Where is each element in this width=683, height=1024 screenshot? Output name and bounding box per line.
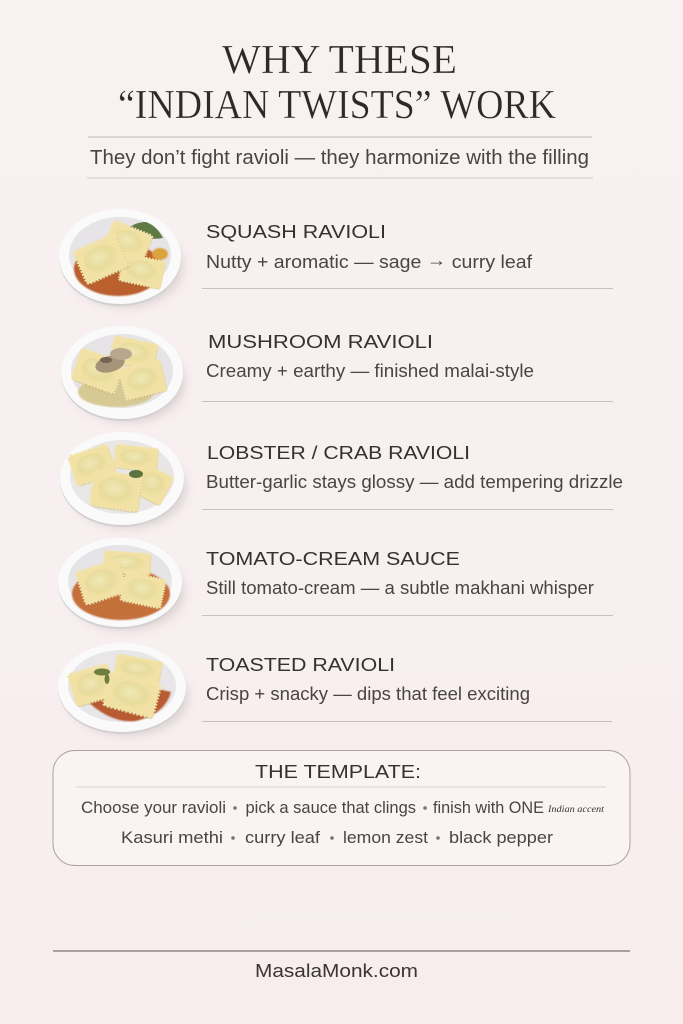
text: template steps: Choose your ravioli	[81, 799, 226, 817]
heading: the template: THE TEMPLATE:	[255, 762, 421, 782]
title: WHY THESE	[222, 36, 457, 82]
text: template steps: finish with ONE	[433, 799, 544, 817]
icon: squash ravioli plate	[59, 209, 183, 307]
heading: tomato-cream sauce: TOMATO-CREAM SAUCE	[206, 549, 460, 569]
text: template steps	[81, 799, 605, 817]
subtitle with rules: They don’t fight ravioli — they harmonize with the filling	[90, 147, 589, 169]
icon: tomato-cream ravioli plate	[58, 538, 184, 630]
text: toasted description: Crisp + snacky — dips that feel exciting	[206, 684, 530, 704]
panel: tomato-cream sauce	[58, 538, 613, 630]
text: template accents: black pepper	[449, 829, 554, 847]
heading: lobster / crab ravioli: LOBSTER / CRAB RAVIOLI	[207, 443, 470, 463]
text: tomato-cream description: Still tomato-cream — a subtle makhani whisper	[206, 578, 594, 598]
text: template accents	[121, 829, 554, 847]
text: template accents: Kasuri methi	[121, 829, 223, 847]
panel: lobster / crab ravioli	[60, 432, 623, 528]
text: template steps: Indian accent	[547, 804, 605, 814]
heading: mushroom ravioli: MUSHROOM RAVIOLI	[208, 332, 433, 352]
panel: squash ravioli	[59, 209, 613, 307]
icon: toasted ravioli plate	[58, 643, 188, 735]
text: squash description: Nutty + aromatic — sage	[206, 252, 405, 272]
text: squash description: →	[427, 250, 446, 270]
icon: mushroom ravioli plate	[61, 326, 185, 422]
panel: mushroom ravioli	[61, 326, 613, 422]
text: template accents: lemon zest	[343, 829, 428, 847]
panel: the template	[53, 750, 630, 866]
icon: lobster ravioli plate	[60, 432, 186, 528]
title	[118, 36, 556, 127]
text: squash description: curry leaf	[446, 252, 533, 272]
text: lobster description: Butter-garlic stays glossy — add tempering drizzle	[206, 472, 623, 492]
text: mushroom description: Creamy + earthy — finished malai-style	[206, 361, 534, 381]
text: template steps: pick a sauce that clings	[246, 799, 416, 817]
text: template accents: curry leaf	[245, 829, 320, 847]
heading: toasted ravioli: TOASTED RAVIOLI	[206, 655, 395, 675]
panel: toasted ravioli	[58, 643, 612, 735]
footer website: MasalaMonk.com	[255, 960, 418, 981]
heading: squash ravioli: SQUASH RAVIOLI	[206, 222, 386, 242]
title: “INDIAN TWISTS” WORK	[118, 81, 556, 127]
